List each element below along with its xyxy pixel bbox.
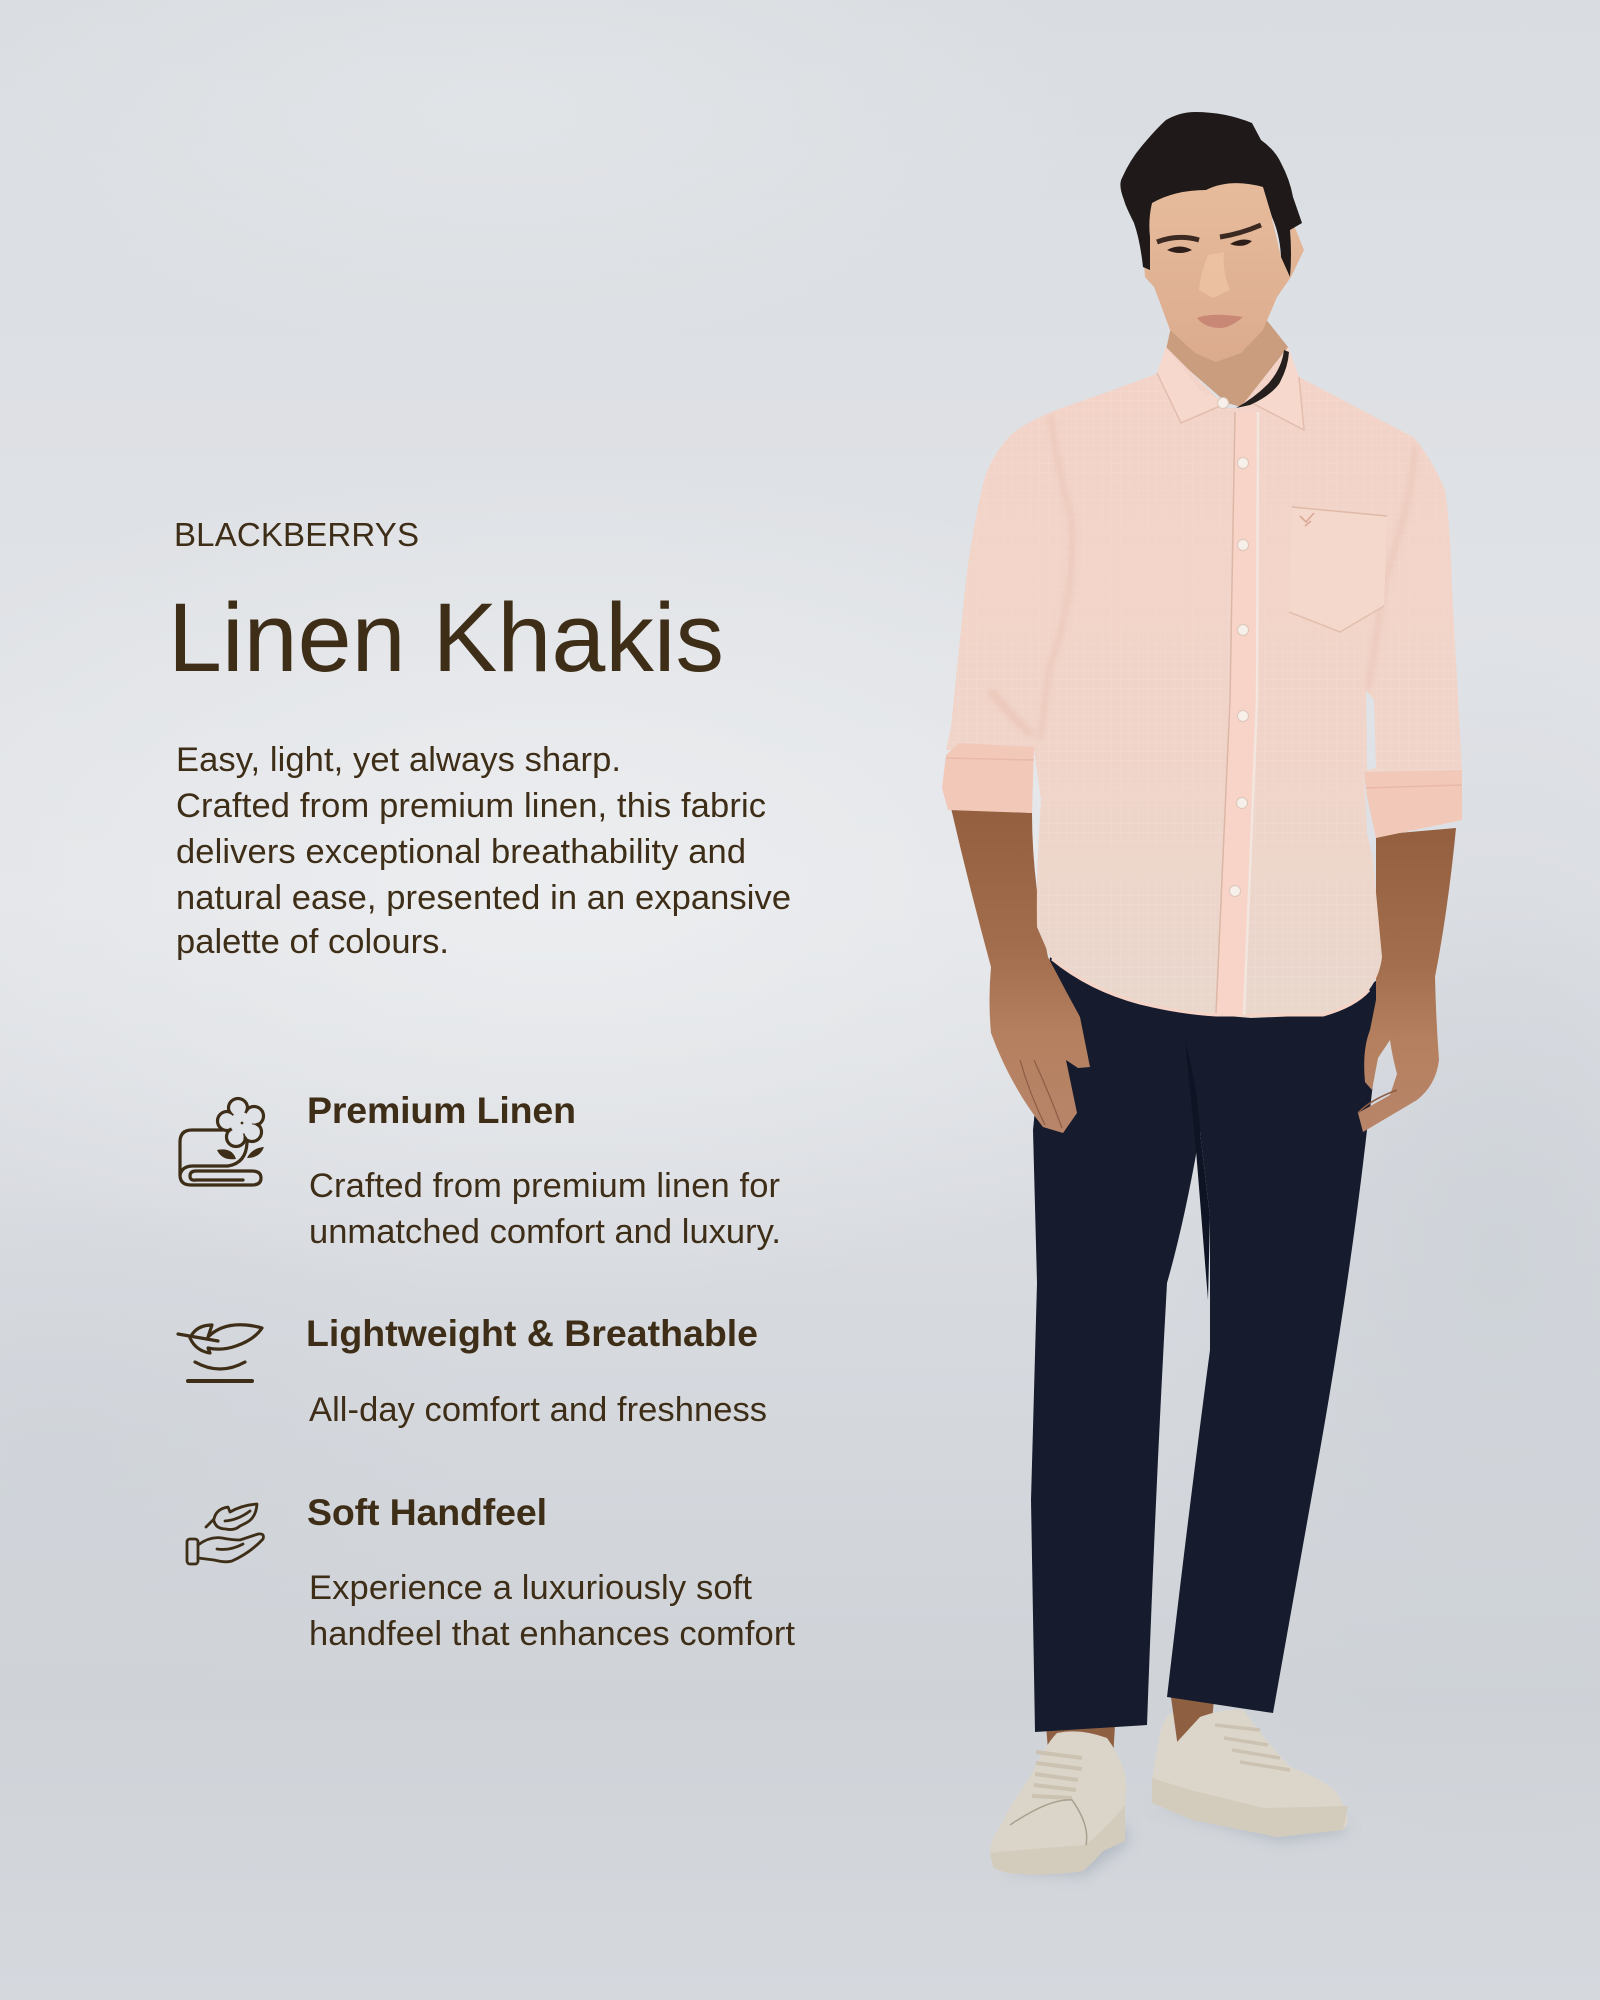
neck: [1166, 318, 1288, 407]
intro paragraph: [176, 741, 791, 961]
text: Premium Linen description: [309, 1167, 781, 1251]
title: Linen Khakis: [168, 583, 724, 692]
hem edge: [1052, 959, 1369, 1015]
brand label: BLACKBERRYS: [174, 516, 419, 553]
icon: folded fabric with flower: [180, 1098, 264, 1185]
intro paragraph: Crafted from premium linen, this fabric: [176, 787, 766, 825]
intro paragraph: palette of colours.: [176, 923, 449, 961]
heading: Soft Handfeel: Soft Handfeel: [307, 1491, 547, 1533]
left arm and hand: [951, 808, 1090, 1133]
icon: hand holding leaf: [187, 1504, 263, 1564]
left cuff: [942, 743, 1034, 813]
right arm and hand: [1358, 828, 1456, 1132]
chest pocket: [1289, 507, 1387, 632]
text: Soft Handfeel description: [309, 1569, 795, 1653]
ankles: [1046, 1690, 1215, 1775]
sleeve shading: [990, 415, 1415, 740]
face: [1143, 180, 1304, 362]
shoe shadows: [1000, 1805, 1350, 1876]
eyebrows: [1157, 225, 1261, 242]
right cuff: [1364, 770, 1462, 838]
model figure: [942, 112, 1462, 1876]
hair: [1120, 112, 1302, 277]
collar: [1157, 347, 1227, 423]
trousers: [1031, 957, 1377, 1732]
shirt: [946, 347, 1462, 1018]
text: Lightweight description: All-day comfort and freshness: [309, 1391, 767, 1429]
shirt buttons: [1218, 398, 1248, 896]
text: Soft Handfeel description: Experience a luxuriously soft: [309, 1569, 752, 1607]
text: Premium Linen description: unmatched comfort and luxury.: [309, 1213, 781, 1251]
text: Premium Linen description: Crafted from premium linen for: [309, 1167, 780, 1205]
intro paragraph: delivers exceptional breathability and: [176, 833, 746, 871]
intro paragraph: Easy, light, yet always sharp.: [176, 741, 621, 779]
left shoe: [990, 1731, 1126, 1875]
nose shade: [1199, 252, 1230, 298]
icon: feather above surface: [178, 1325, 262, 1381]
open collar shadow: [1236, 350, 1289, 408]
intro paragraph: natural ease, presented in an expansive: [176, 879, 791, 917]
mouth: [1197, 315, 1243, 328]
text: Soft Handfeel description: handfeel that enhances comfort: [309, 1615, 795, 1653]
placket: [1216, 412, 1258, 1015]
heading: Premium Linen: Premium Linen: [307, 1089, 576, 1131]
right shoe: [1152, 1710, 1348, 1837]
eyes: [1167, 240, 1252, 253]
gap right of torso: [1366, 690, 1376, 770]
heading: Lightweight & Breathable: Lightweight & Breathable: [306, 1312, 758, 1354]
